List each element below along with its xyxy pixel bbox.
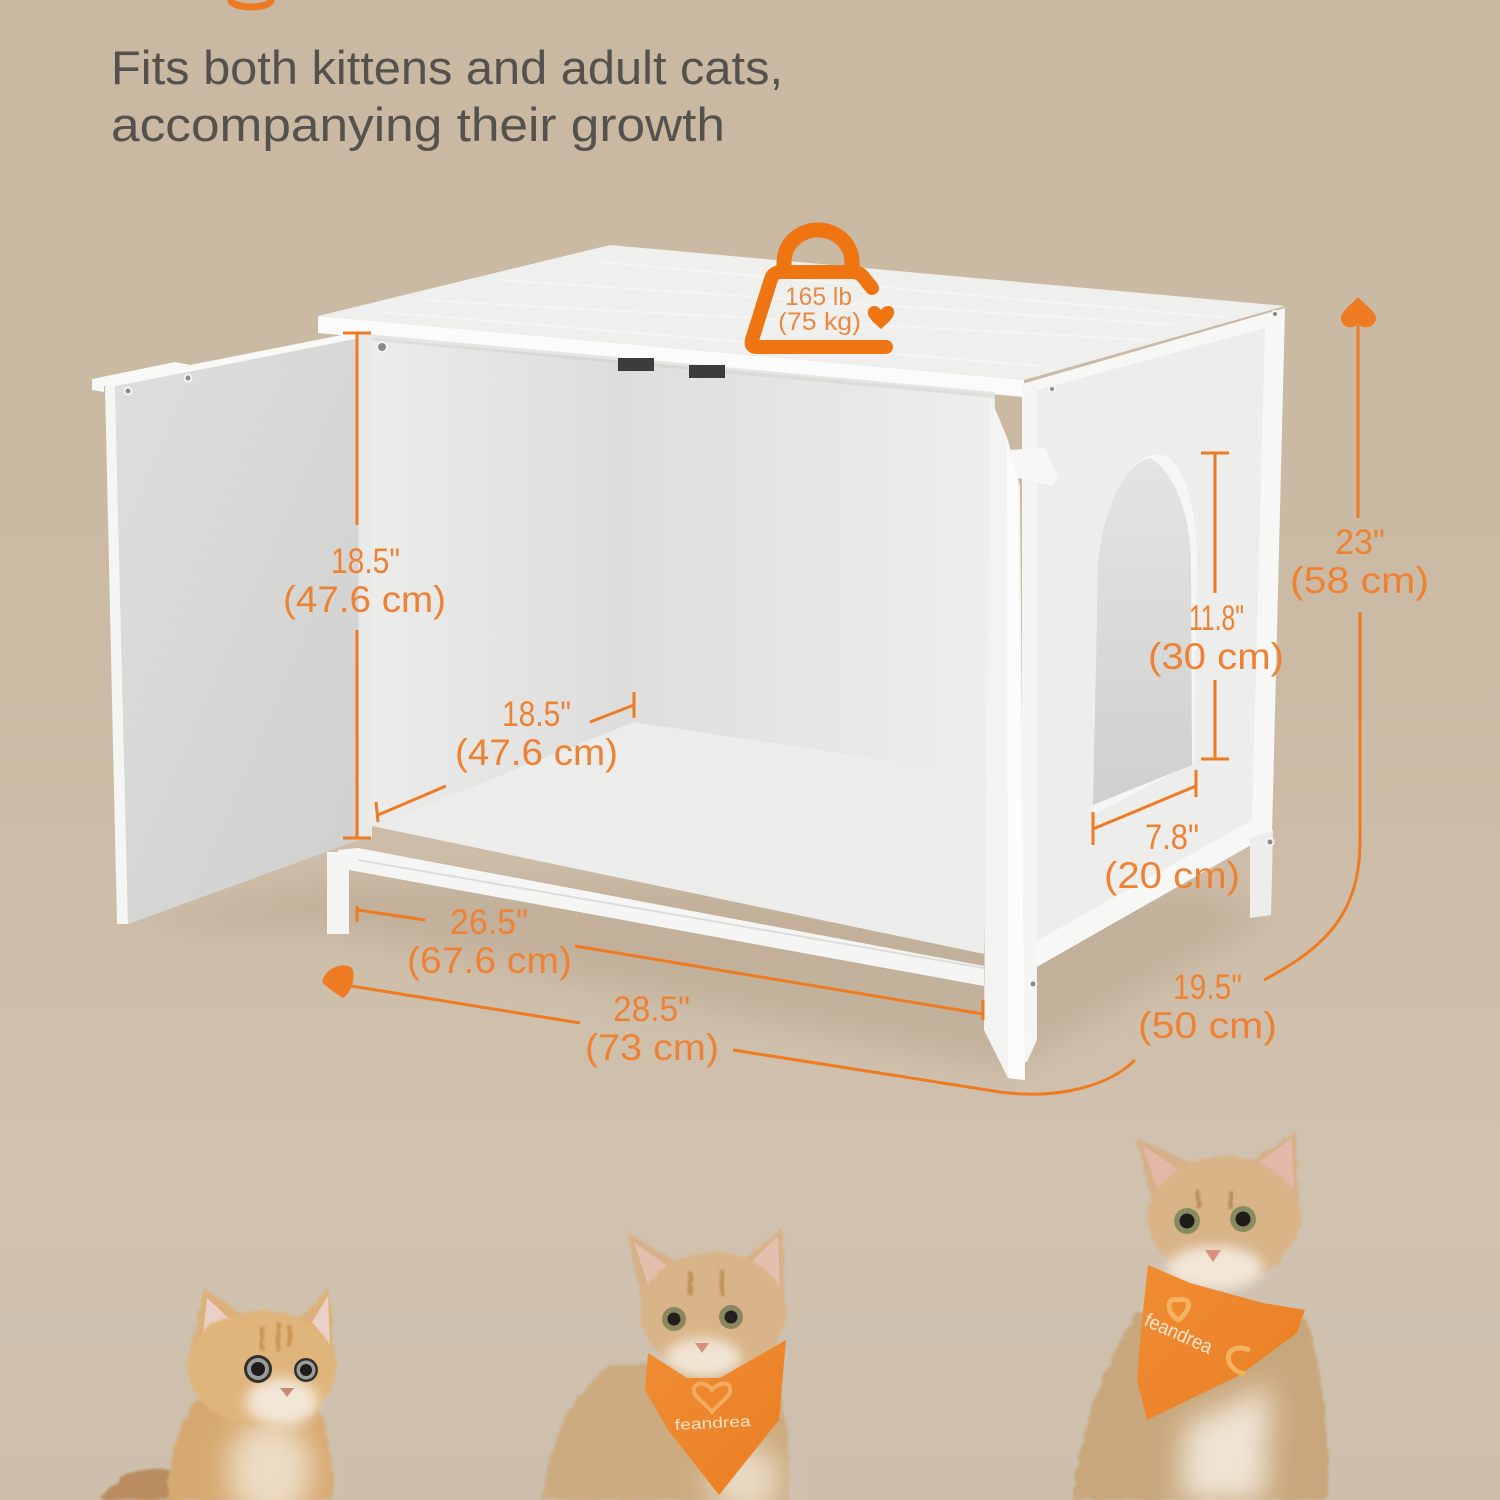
side cat opening: [1093, 458, 1192, 805]
rail edge: [358, 860, 984, 968]
left door outer edge: [105, 385, 128, 924]
kitten nose: [280, 1388, 294, 1397]
muzzle: [1167, 1246, 1263, 1290]
right side frame: [1022, 308, 1285, 968]
right door front face: [1007, 440, 1025, 1080]
kitten ears: [190, 1288, 334, 1365]
kitten ear inner: [202, 1296, 330, 1345]
icon: weight capacity: 165 lb: [785, 283, 852, 311]
dimension: opening height: [1148, 453, 1284, 759]
chest: [710, 1445, 780, 1500]
dimension: door height: (47.6 cm): [283, 579, 446, 620]
cat: kitten: [100, 1288, 336, 1500]
bandana: [1137, 1265, 1305, 1420]
dimension: overall height: 23": [1335, 523, 1385, 562]
dimension: interior depth: (47.6 cm): [455, 732, 618, 773]
dimension: opening width: (20 cm): [1104, 855, 1240, 896]
dimension: interior width: 26.5": [450, 903, 528, 942]
body: [1072, 1313, 1328, 1500]
ears: [627, 1227, 786, 1320]
forehead stripes: [1198, 1190, 1230, 1208]
icon: heart arrow up: [1341, 297, 1376, 327]
head: [1148, 1156, 1300, 1280]
door hinge tab: [1007, 448, 1058, 486]
cat: adult cat with bandana: [1072, 1130, 1328, 1500]
bandana pattern: [1169, 1299, 1250, 1374]
heading text: [111, 41, 783, 151]
kitten eyes: [244, 1355, 318, 1383]
muzzle: [665, 1338, 741, 1378]
left door panel: [115, 333, 370, 924]
dimension: overall width: 28.5": [613, 990, 690, 1029]
cabinet top panel: [318, 245, 1285, 380]
top wood grain: [380, 262, 1230, 366]
door screws: [124, 311, 1278, 988]
left door top flap: [92, 332, 370, 392]
kitten muzzle: [246, 1378, 318, 1426]
icon: cropped orange heading mark: [231, 0, 271, 7]
heading text: Fits both kittens and adult cats,: [111, 41, 783, 94]
kitten forehead stripes: [262, 1322, 290, 1352]
dimension: overall depth: (50 cm): [1138, 1005, 1277, 1046]
nose: [1205, 1250, 1221, 1262]
right door: [984, 399, 1025, 1080]
chest: [1180, 1385, 1270, 1500]
left leg: [327, 852, 349, 934]
magnets: [618, 358, 654, 371]
body: [542, 1360, 789, 1500]
dimension: overall depth: [1138, 612, 1360, 1046]
cabinet: [92, 245, 1285, 1080]
dimension: interior depth: [376, 692, 634, 822]
ears: [1136, 1130, 1300, 1225]
dimension: door height: [283, 333, 446, 838]
side cat opening rim: [1093, 454, 1197, 815]
kitten tail: [100, 1469, 175, 1500]
kitten head: [188, 1310, 336, 1426]
dimension: interior depth: 18.5": [502, 695, 571, 734]
floor: [372, 722, 990, 954]
dimension: opening height: (30 cm): [1148, 636, 1284, 677]
dimension: interior width: [357, 903, 983, 1020]
front centre post: [1022, 386, 1037, 1062]
bandana heart pattern: [694, 1384, 730, 1412]
top front edge: [318, 316, 1024, 397]
forehead stripes: [690, 1270, 722, 1295]
icon: weight capacity: [752, 230, 894, 347]
ear inner: [1142, 1138, 1294, 1190]
ear inner: [634, 1236, 780, 1290]
dimension: opening height: 11.8": [1189, 599, 1244, 638]
back left wall: [366, 336, 634, 826]
kitten chest: [228, 1420, 312, 1500]
dimension: overall depth: 19.5": [1173, 968, 1242, 1007]
bandana: feandrea: [674, 1413, 752, 1434]
under-top shadow: [366, 334, 995, 398]
magnet 2: [689, 365, 725, 378]
kitten body: [168, 1400, 332, 1500]
dimension: opening width: [1093, 770, 1240, 896]
left door inner edge: [358, 333, 372, 838]
heading text: accompanying their growth: [111, 98, 725, 151]
dimension: overall height: [1290, 297, 1429, 601]
floor shadow: [130, 880, 1270, 1070]
icon: heart arrow left: [322, 965, 354, 998]
icon: weight capacity: (75 kg): [778, 308, 861, 336]
head: [640, 1252, 786, 1372]
dimension: overall width: [322, 965, 1135, 1094]
eyes: [662, 1305, 743, 1331]
right side panel: [1033, 328, 1265, 943]
eyes: [1174, 1206, 1256, 1234]
dimension: opening width: 7.8": [1145, 818, 1199, 857]
bottom front rail: [338, 848, 984, 986]
right leg: [1250, 830, 1273, 918]
nose: [695, 1343, 709, 1353]
dimension: overall height: (58 cm): [1290, 560, 1429, 601]
cat: young cat with bandana: [542, 1227, 789, 1500]
back right wall: [634, 358, 995, 778]
dimension: overall width: (73 cm): [585, 1027, 719, 1068]
bandana: [645, 1340, 786, 1495]
bandana: feandrea: [1141, 1309, 1216, 1359]
dimension: interior width: (67.6 cm): [407, 940, 572, 981]
dimension: door height: 18.5": [331, 542, 400, 581]
